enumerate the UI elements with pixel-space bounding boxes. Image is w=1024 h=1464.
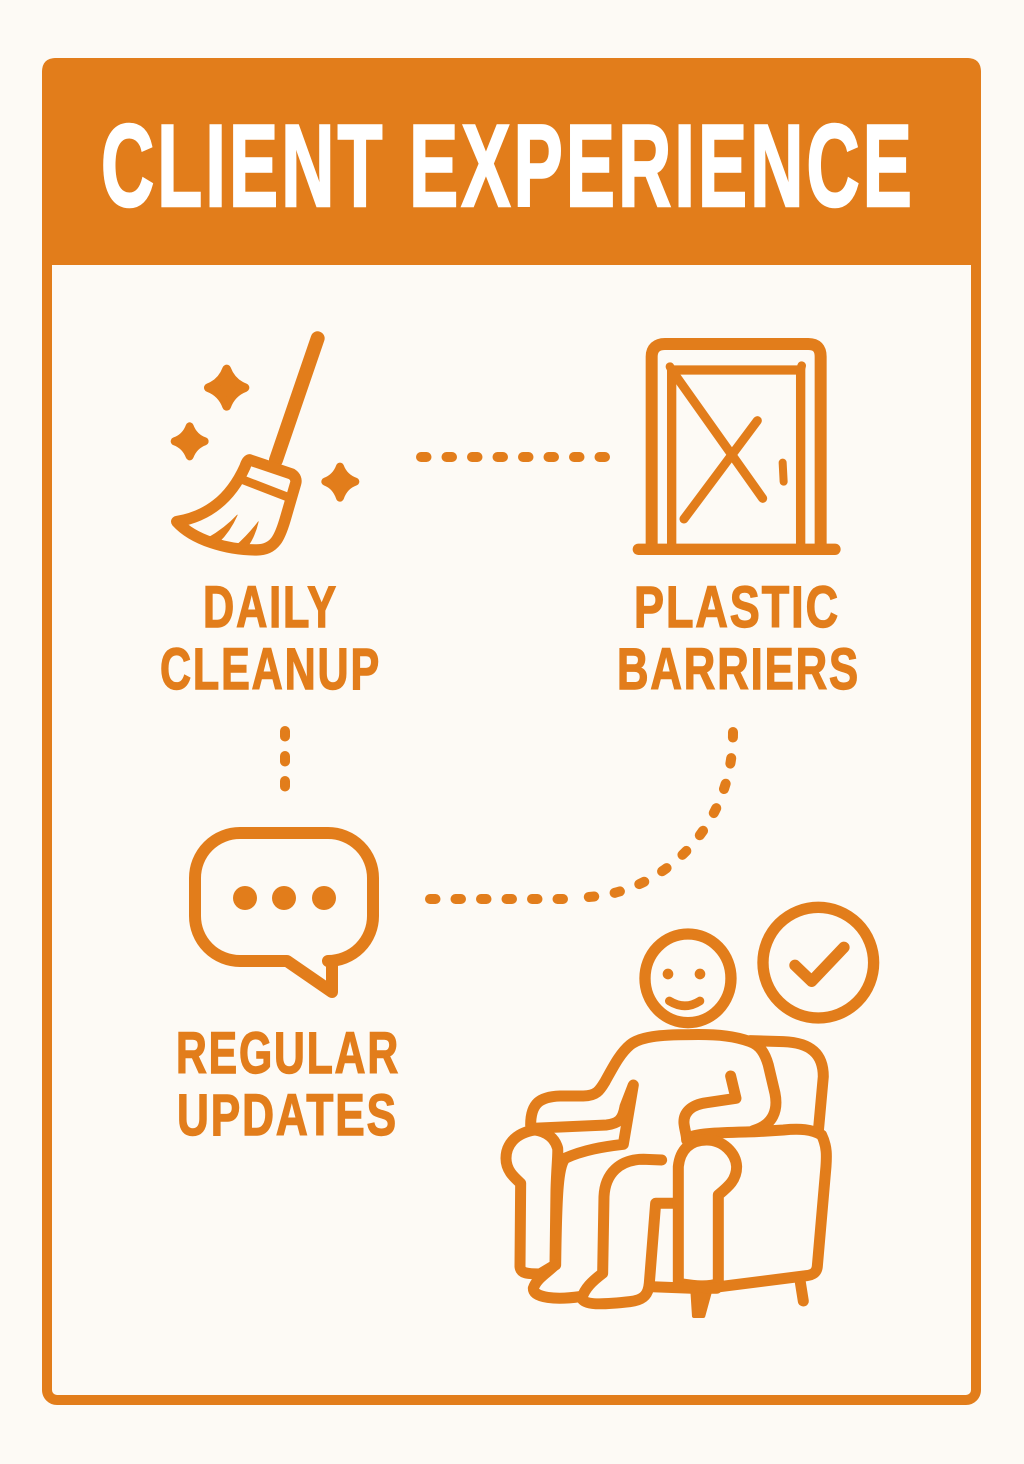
connector: cleanup to updates xyxy=(280,731,290,788)
header banner xyxy=(42,58,981,265)
icon: speech bubble xyxy=(195,833,373,992)
label: regular updates: REGULAR xyxy=(176,1021,400,1086)
label: plastic barriers xyxy=(617,575,860,702)
connector: updates to satisfied client via barriers xyxy=(430,732,733,899)
head xyxy=(645,934,731,1023)
label: plastic barriers: BARRIERS xyxy=(617,637,860,702)
icon: satisfied client in armchair xyxy=(506,907,874,1316)
body and arms xyxy=(531,1035,776,1131)
label: regular updates xyxy=(176,1021,400,1148)
label: regular updates: UPDATES xyxy=(177,1083,398,1148)
face xyxy=(663,969,705,1006)
label: daily cleanup xyxy=(160,575,381,702)
check badge xyxy=(763,907,874,1018)
label: daily cleanup: DAILY xyxy=(203,575,338,640)
connector: cleanup to barriers xyxy=(421,452,606,462)
armchair xyxy=(750,1041,823,1132)
icon: broom with sparkles xyxy=(175,338,355,550)
label: daily cleanup: CLEANUP xyxy=(160,637,381,702)
label: plastic barriers: PLASTIC xyxy=(634,575,840,640)
icon: door with plastic barrier xyxy=(638,344,835,549)
